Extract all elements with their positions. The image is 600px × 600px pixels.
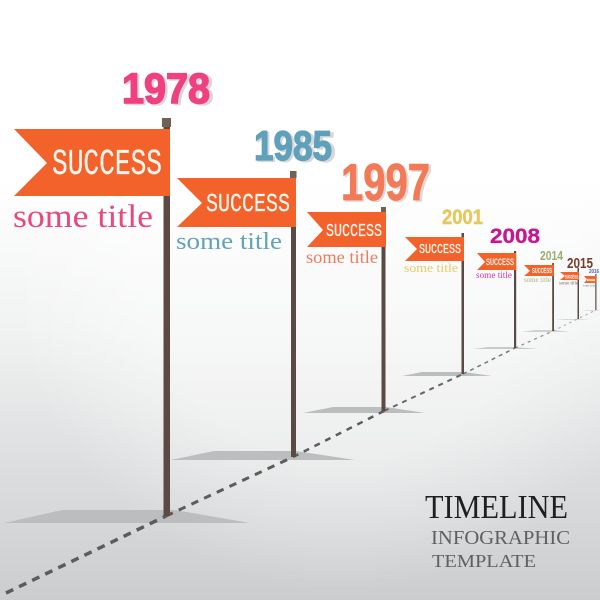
flag xyxy=(584,276,596,283)
year 1985: 1985 xyxy=(254,122,332,169)
milestone 2014 xyxy=(524,248,564,331)
title: TIMELINE: TIMELINE xyxy=(425,489,568,526)
flag xyxy=(560,272,579,280)
year 2001: 2001 xyxy=(442,206,483,229)
pole xyxy=(462,233,464,374)
flag xyxy=(405,237,464,261)
subtitle: some title xyxy=(13,199,153,235)
flag label: SUCCESS xyxy=(419,243,461,258)
milestone 1985 xyxy=(176,122,336,457)
subtitle: some title xyxy=(583,284,595,288)
subtitle: some title xyxy=(404,260,458,275)
flag xyxy=(524,265,554,276)
flag xyxy=(307,212,386,247)
year 2015: 2015 xyxy=(567,255,593,272)
year 1978 shadow: 1978 xyxy=(124,66,214,114)
pole xyxy=(595,274,596,310)
pole xyxy=(162,118,171,516)
flag xyxy=(177,178,296,227)
ground shadows xyxy=(4,310,600,523)
flag xyxy=(477,253,516,270)
year 1985 shadow: 1985 xyxy=(256,124,336,170)
milestone 2016 xyxy=(583,269,599,310)
milestone 1978 xyxy=(13,65,214,516)
subtitle: TEMPLATE: TEMPLATE xyxy=(432,551,536,571)
subtitle: some title xyxy=(176,229,282,255)
milestone 2001 xyxy=(404,206,483,374)
subtitle: some title xyxy=(524,276,551,284)
subtitle: some title xyxy=(306,247,378,267)
flag label: SUCCESS xyxy=(486,258,514,269)
flag xyxy=(14,129,170,196)
year 2014: 2014 xyxy=(540,248,564,263)
milestone 2015 xyxy=(559,255,593,319)
flag label: SUCCESS xyxy=(587,279,595,282)
pole xyxy=(552,263,554,331)
pole xyxy=(290,171,296,457)
year 1978: 1978 xyxy=(122,65,210,113)
pole xyxy=(514,251,516,348)
subtitle: INFOGRAPHIC: INFOGRAPHIC xyxy=(431,527,570,549)
flag label: SUCCESS xyxy=(52,144,162,185)
pole xyxy=(578,268,579,319)
flag label: SUCCESS xyxy=(532,268,552,276)
subtitle: some title xyxy=(559,282,579,286)
milestone 1997 xyxy=(306,154,432,411)
year 1997 shadow: 1997 xyxy=(342,156,432,214)
flag label: SUCCESS xyxy=(565,274,578,280)
year 2008: 2008 xyxy=(490,225,540,248)
subtitle: some title xyxy=(476,271,512,281)
milestone 2008 xyxy=(476,225,540,348)
pole xyxy=(381,207,386,411)
year 1997: 1997 xyxy=(341,154,430,212)
flag label: SUCCESS xyxy=(206,189,290,219)
flag label: SUCCESS xyxy=(326,221,382,242)
dashed timeline path xyxy=(6,310,596,593)
